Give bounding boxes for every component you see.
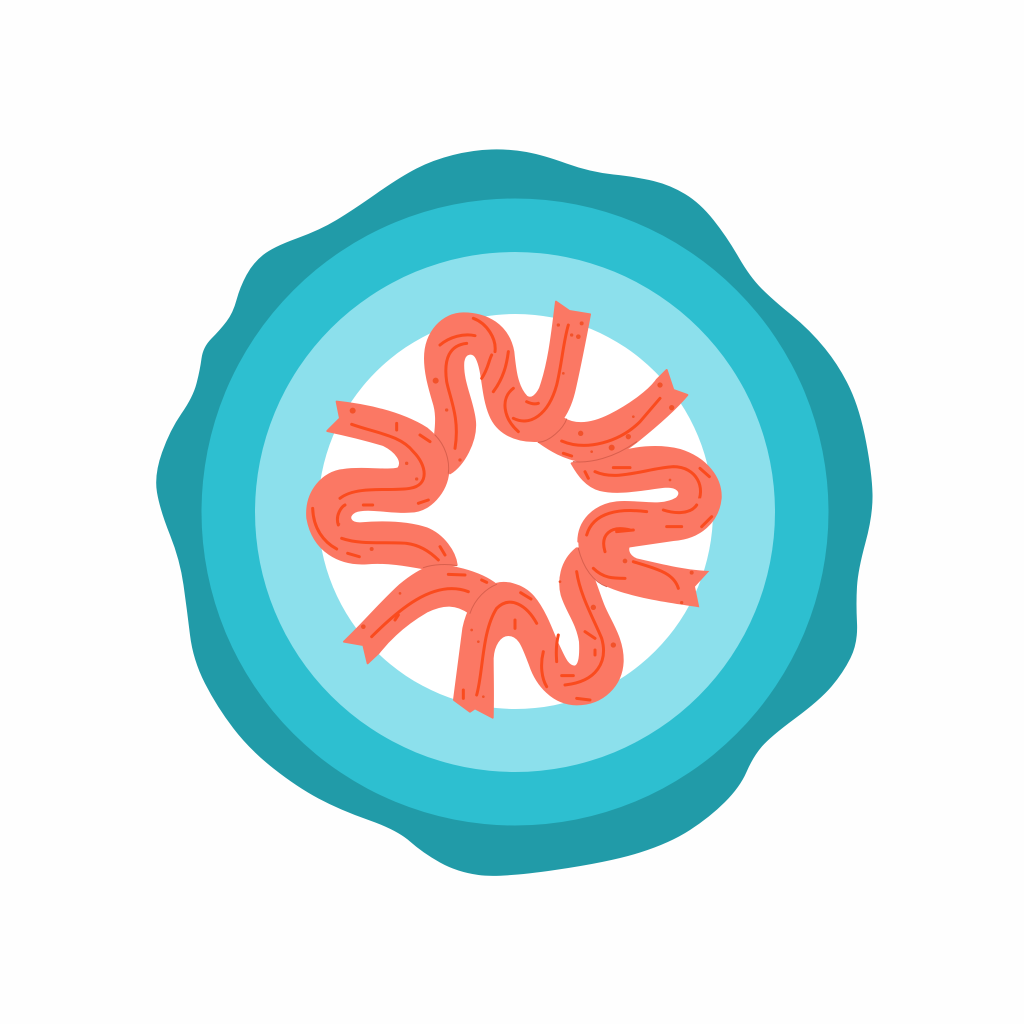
- light cyan ring: [255, 252, 775, 772]
- white centre: [318, 314, 713, 709]
- middle cyan ring: [202, 198, 828, 826]
- ribbon piece: left wave: [307, 402, 457, 568]
- ribbon piece: upper right strip: [538, 370, 687, 462]
- ribbon piece: lower left strip: [344, 565, 497, 663]
- ribbon piece: top wave: [425, 302, 590, 473]
- ribbon piece: bottom wave: [454, 548, 623, 718]
- outer wavy teal blob: [156, 149, 873, 876]
- ribbon piece: right upper wave: [572, 447, 721, 548]
- coral ribbon: [307, 302, 721, 718]
- ribbon piece: right lower wave, over the bottom wave: [578, 498, 721, 607]
